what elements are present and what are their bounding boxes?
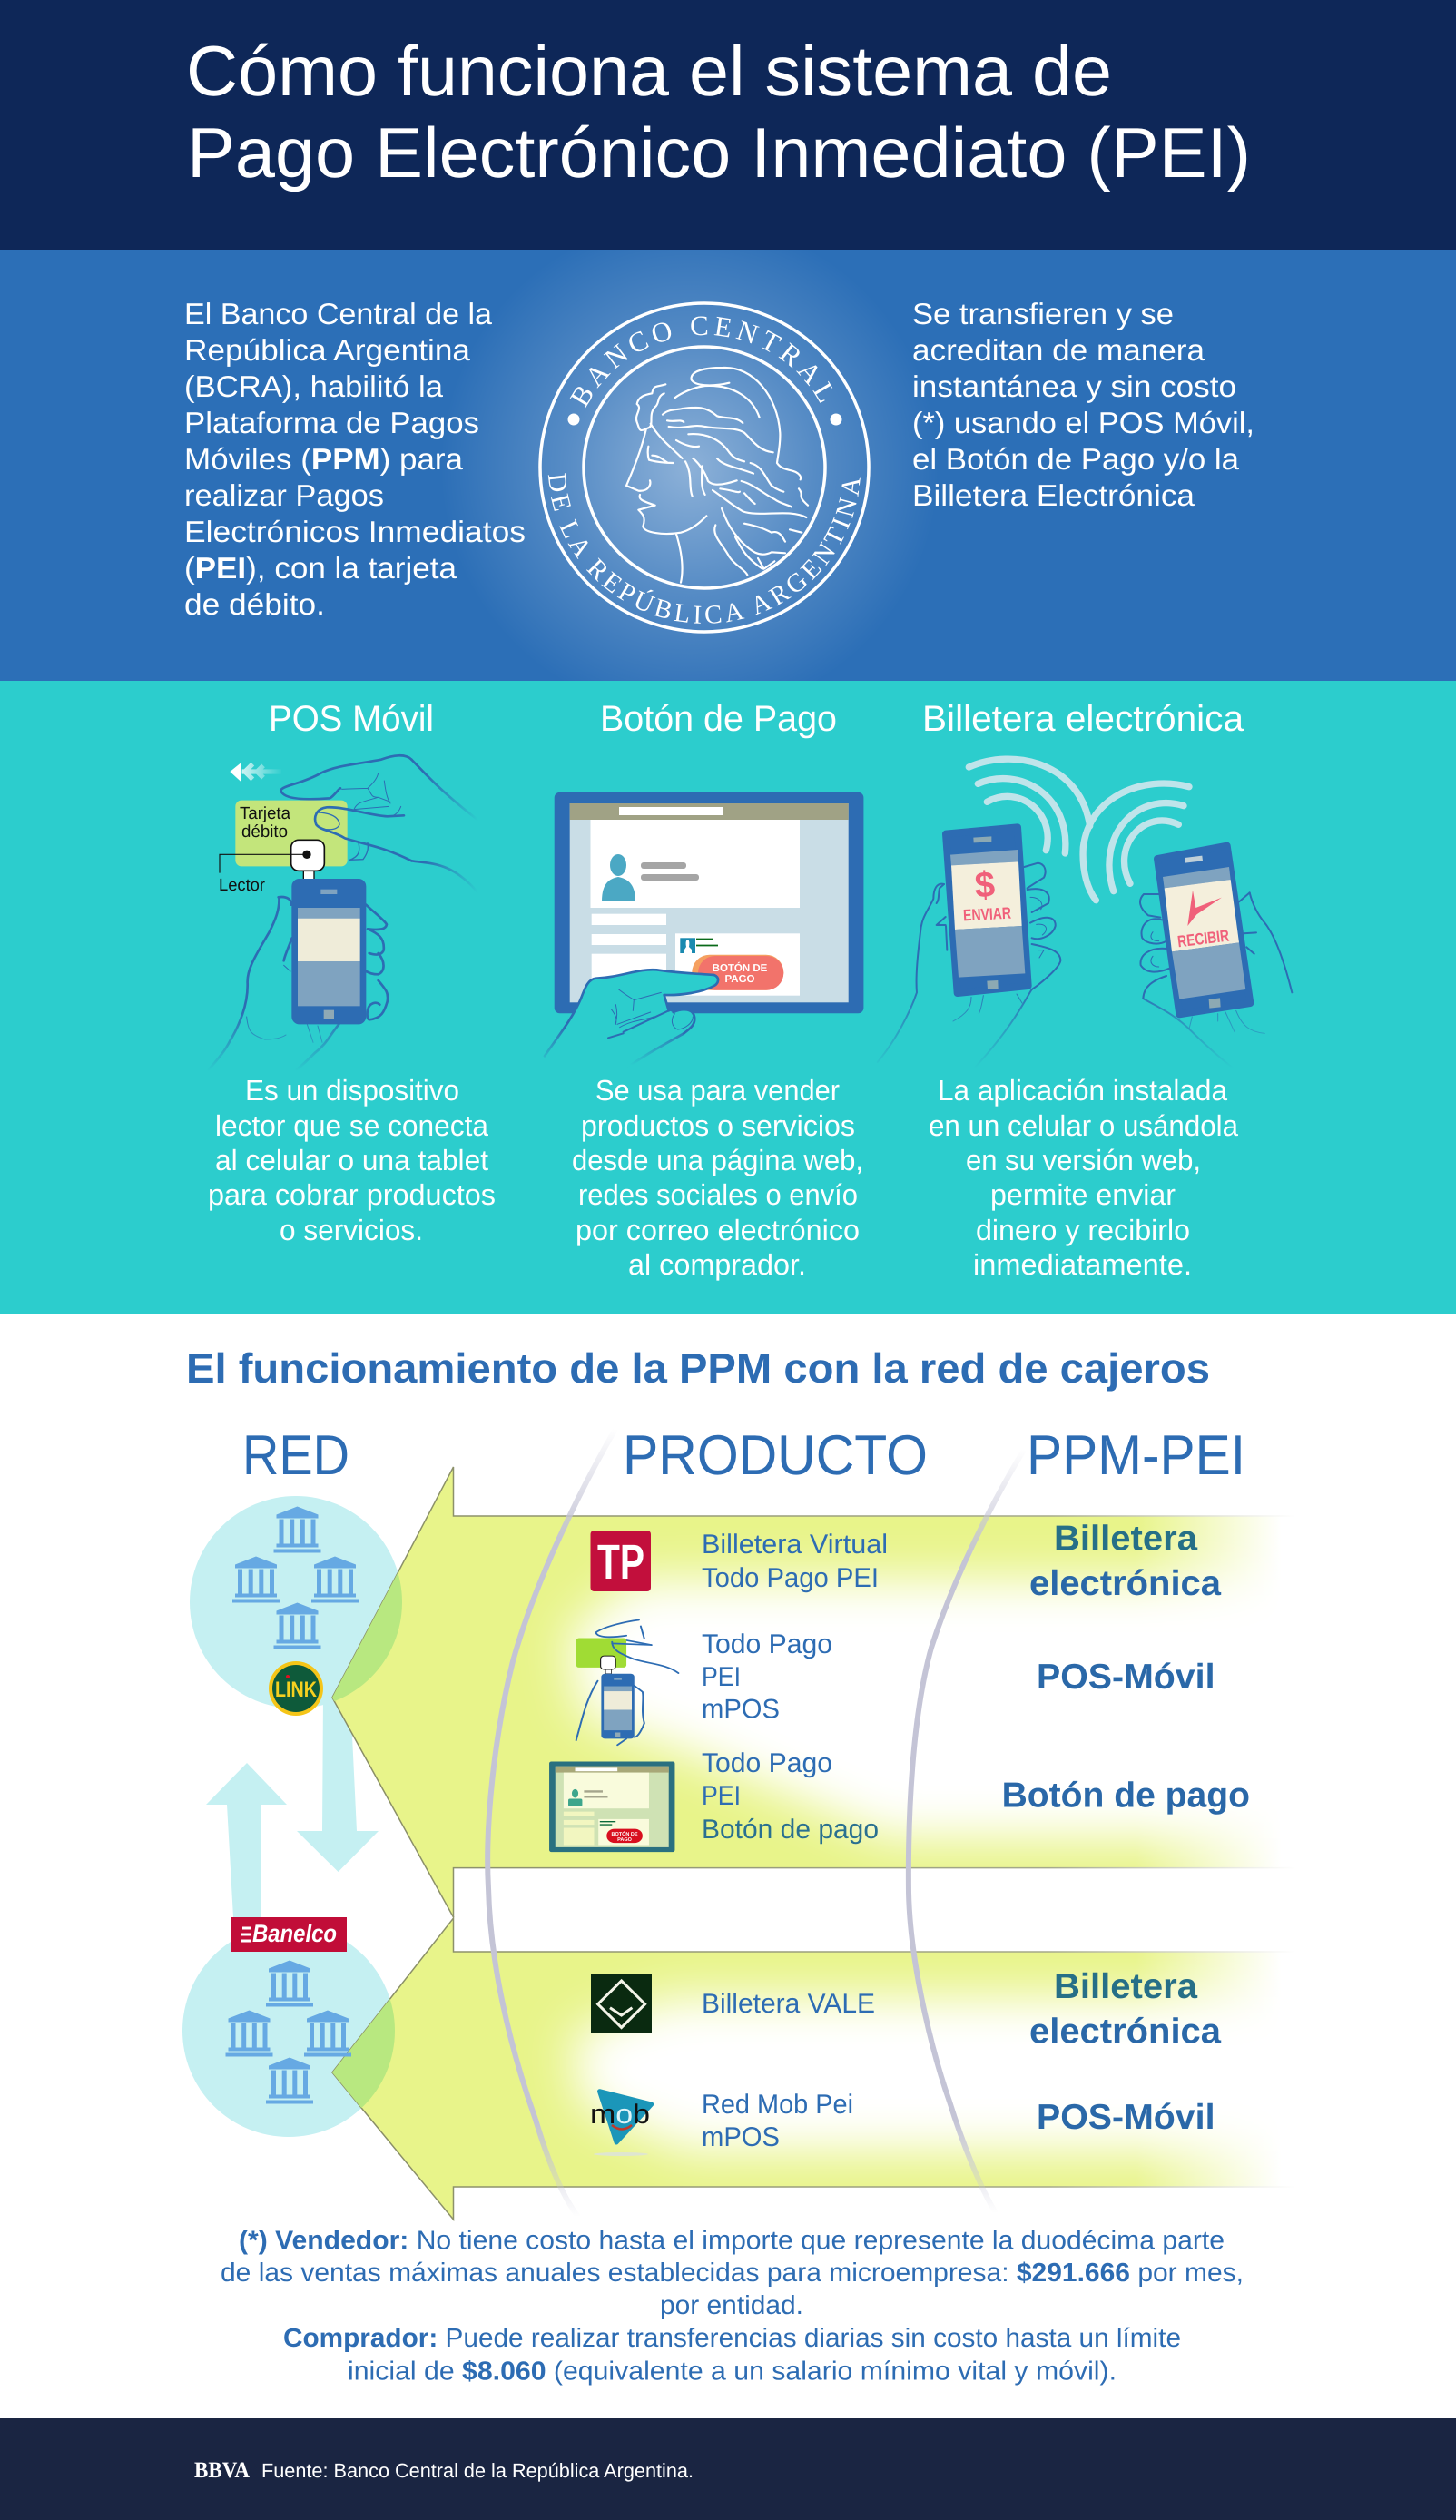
footnote text: Comprador: Puede realizar transferencias diarias sin costo hasta un límite	[283, 2324, 1181, 2353]
text: POS Móvil description: o servicios.	[280, 1214, 423, 1246]
curved divider: right	[909, 1450, 1024, 2213]
right intro text: (*) usando el POS Móvil,	[912, 406, 1254, 439]
left intro text: Electrónicos Inmediatos	[184, 515, 526, 548]
product labels: Todo Pago	[702, 1748, 832, 1778]
column header: PPM-PEI: PPM-PEI	[1027, 1424, 1245, 1487]
text: Botón de Pago description: productos o servicios	[581, 1109, 855, 1142]
left intro text: Móviles (PPM) para	[184, 442, 464, 476]
footnote text: inicial de $8.060 (equivalente a un salario mínimo vital y móvil).	[348, 2358, 1117, 2387]
text: POS Móvil description: Es un dispositivo	[245, 1074, 459, 1107]
left intro text: Plataforma de Pagos	[184, 406, 479, 439]
left intro text: (BCRA), habilitó la	[184, 369, 444, 403]
footer	[0, 2418, 1456, 2520]
footnote text	[221, 2227, 1244, 2387]
network circle: top	[190, 1496, 402, 1708]
product labels: Botón de pago	[702, 1815, 879, 1845]
illustration: two phones exchanging money: ENVIAR	[963, 904, 1011, 924]
illustration: two phones exchanging money: RECIBIR	[1176, 927, 1230, 950]
text: Botón de Pago description: desde una página web,	[572, 1144, 863, 1176]
product labels: PEI	[702, 1662, 741, 1692]
PPM-PEI labels: electrónica	[1029, 2013, 1221, 2052]
text: Botón de Pago description: al comprador.	[628, 1248, 806, 1281]
seal: Banco Central	[538, 301, 871, 634]
illustration: POS reader and phone: débito	[241, 822, 288, 842]
heading: PPM with ATM network: El funcionamiento de la PPM con la red de cajeros	[186, 1344, 1210, 1392]
heading: Botón de Pago: Botón de Pago	[600, 699, 837, 739]
logo: Banelco: Banelco	[252, 1920, 337, 1947]
PPM-PEI labels	[1002, 1520, 1250, 2137]
footnote text: (*) Vendedor: No tiene costo hasta el importe que represente la duodécima parte	[239, 2227, 1225, 2256]
logo: VALE	[591, 1974, 652, 2033]
network flow diagram	[182, 1444, 1278, 2221]
product labels: Billetera VALE	[702, 1989, 875, 2019]
text: Billetera description: en su versión web,	[966, 1144, 1201, 1176]
PPM-PEI labels: Billetera	[1054, 1520, 1197, 1559]
icon: mini tablet: BOTÓN DE	[611, 1831, 638, 1837]
text: Botón de Pago description: por correo electrónico	[576, 1214, 860, 1246]
column header: PRODUCTO: PRODUCTO	[623, 1424, 928, 1487]
text: POS Móvil description: para cobrar productos	[208, 1178, 496, 1211]
footnote text: de las ventas máximas anuales establecidas para microempresa: $291.666 por mes,	[221, 2259, 1244, 2288]
right intro text: Se transfieren y se	[912, 297, 1174, 330]
logo: Banelco	[231, 1917, 347, 1952]
product labels: mPOS	[702, 1694, 780, 1725]
left intro text: realizar Pagos	[184, 478, 384, 512]
product labels: Billetera Virtual	[702, 1530, 888, 1560]
right intro text: el Botón de Pago y/o la	[912, 442, 1240, 476]
text: Billetera description: La aplicación instalada	[938, 1074, 1227, 1107]
title band	[0, 0, 1456, 250]
panel: payment methods	[0, 681, 1456, 1314]
text: POS Móvil description: lector que se conecta	[215, 1109, 488, 1142]
text: Botón de Pago description	[572, 1074, 863, 1281]
text: POS Móvil description	[208, 1074, 496, 1246]
illustration: POS reader and phone	[209, 755, 478, 1069]
logo: BBVA: BBVA	[194, 2458, 250, 2483]
column header: RED: RED	[242, 1424, 349, 1487]
right intro text: Billetera Electrónica	[912, 478, 1195, 512]
logo: mob	[590, 2092, 652, 2156]
left intro text: República Argentina	[184, 333, 471, 367]
text: Botón de Pago description: redes sociales o envío	[578, 1178, 858, 1211]
source credit: Fuente: Banco Central de la República Argentina.	[261, 2459, 694, 2482]
product labels: mPOS	[702, 2122, 780, 2152]
seal: profile head	[626, 368, 808, 583]
icon: mini tablet	[549, 1762, 674, 1852]
seal: Banco Central: BANCO CENTRAL	[570, 316, 833, 409]
logo: LINK	[269, 1661, 323, 1716]
illustration: POS reader and phone: Lector	[219, 876, 266, 895]
logo: Todo Pago: TP	[597, 1535, 644, 1590]
panel: BCRA intro	[0, 250, 1456, 681]
curved divider: left	[487, 1429, 615, 2217]
product labels: Todo Pago PEI	[702, 1563, 879, 1593]
PPM-PEI labels: POS-Móvil	[1037, 2098, 1215, 2137]
footnote text: por entidad.	[660, 2291, 803, 2320]
product labels: PEI	[702, 1781, 741, 1811]
left intro text: El Banco Central de la	[184, 297, 493, 330]
arrow: up to LINK	[206, 1763, 287, 1917]
icon: mini tablet: PAGO	[617, 1837, 633, 1843]
arrow: down from LINK	[297, 1698, 379, 1872]
text: POS Móvil description: al celular o una tablet	[215, 1144, 488, 1176]
PPM-PEI labels: electrónica	[1029, 1564, 1221, 1603]
left intro text	[184, 297, 526, 621]
illustration: tablet with payment button: BOTÓN DE	[713, 961, 768, 974]
logo: LINK: LINK	[275, 1678, 318, 1702]
illustration: two phones exchanging money: $	[974, 864, 996, 906]
PPM-PEI labels: Billetera	[1054, 1967, 1197, 2006]
text: Billetera description: permite enviar	[990, 1178, 1176, 1211]
product labels: Red Mob Pei	[702, 2090, 853, 2120]
right intro text: instantánea y sin costo	[912, 369, 1236, 403]
PPM-PEI labels: POS-Móvil	[1037, 1658, 1215, 1697]
left intro text: (PEI), con la tarjeta	[184, 551, 457, 585]
product labels: Todo Pago	[702, 1629, 832, 1659]
icon: hand pressing button	[545, 970, 718, 1068]
seal: Banco Central: DE LA REPÚBLICA ARGENTINA	[548, 473, 861, 624]
PPM-PEI labels: Botón de pago	[1002, 1777, 1250, 1816]
logo: mob: mob	[590, 2100, 650, 2130]
illustration: tablet with payment button: PAGO	[724, 974, 755, 985]
icons: banks in Banelco network	[225, 1961, 351, 2104]
illustration: POS reader and phone: Tarjeta	[240, 804, 290, 823]
title band: Cómo funciona el sistema de	[186, 31, 1112, 111]
heading: POS Móvil: POS Móvil	[269, 699, 434, 739]
right intro text	[912, 297, 1254, 512]
text: Billetera description	[929, 1074, 1238, 1281]
text: Billetera description: en un celular o usándola	[929, 1109, 1238, 1142]
yellow arrow: lower group	[331, 1916, 1278, 2221]
icon: mini POS	[576, 1620, 678, 1745]
illustration: tablet with payment button	[545, 792, 863, 1068]
text: Botón de Pago description: Se usa para vender	[595, 1074, 840, 1107]
icons: banks in LINK network	[232, 1507, 359, 1649]
text: Billetera description: dinero y recibirlo	[976, 1214, 1190, 1246]
left intro text: de débito.	[184, 587, 325, 621]
heading: Billetera electrónica: Billetera electrónica	[922, 699, 1244, 739]
title band: Pago Electrónico Inmediato (PEI)	[187, 113, 1251, 192]
yellow arrow: upper group	[331, 1467, 1278, 1917]
text: Billetera description: inmediatamente.	[973, 1248, 1192, 1281]
right intro text: acreditan de manera	[912, 333, 1205, 367]
product labels	[702, 1530, 888, 2152]
illustration: two phones exchanging money	[878, 759, 1292, 1068]
network circle: bottom	[182, 1924, 395, 2137]
